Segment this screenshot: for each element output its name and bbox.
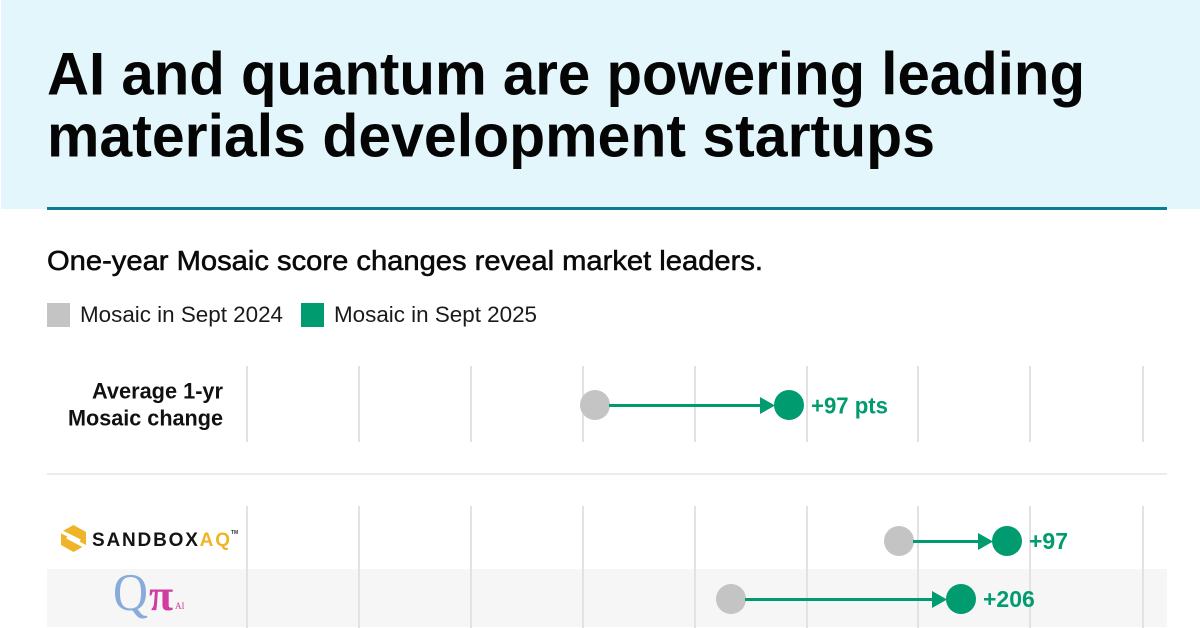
row background: QpiAI bbox=[47, 569, 1167, 627]
dumbbell: average bbox=[580, 390, 888, 420]
dumbbell: average: +97 pts bbox=[811, 392, 888, 418]
subtitle: One-year Mosaic score changes reveal market leaders. bbox=[47, 245, 763, 276]
title bbox=[47, 40, 1085, 170]
section divider bbox=[47, 473, 1167, 475]
logo: SandboxAQ bbox=[58, 524, 238, 553]
legend: 2025 label: Mosaic in Sept 2025 bbox=[334, 302, 537, 327]
row label: average change bbox=[68, 378, 223, 430]
title: AI and quantum are powering leading bbox=[47, 40, 1085, 108]
legend: 2024 label: Mosaic in Sept 2024 bbox=[80, 302, 283, 327]
icon: hexagon stripes bbox=[61, 525, 86, 552]
header band bbox=[1, 0, 1200, 209]
title: materials development startups bbox=[47, 102, 935, 170]
dumbbell: SandboxAQ bbox=[884, 526, 1068, 556]
logo: QpiAI: AI bbox=[175, 601, 184, 611]
logo: QpiAI: π bbox=[149, 571, 173, 620]
dumbbell: QpiAI bbox=[716, 584, 1035, 614]
legend bbox=[47, 302, 537, 327]
dumbbell: QpiAI: +206 bbox=[983, 586, 1035, 612]
row label: average change: Mosaic change bbox=[68, 406, 223, 430]
header rule bbox=[47, 207, 1167, 210]
row label: average change: Average 1-yr bbox=[92, 378, 223, 404]
logo: SandboxAQ: TM bbox=[231, 530, 238, 536]
legend: 2025 swatch bbox=[301, 303, 324, 327]
logo: QpiAI: Q bbox=[113, 564, 148, 622]
legend: 2024 swatch bbox=[47, 303, 70, 327]
logo: QpiAI bbox=[113, 564, 184, 622]
wordmark: SANDBOXAQ bbox=[92, 530, 230, 551]
dumbbell: SandboxAQ: +97 bbox=[1029, 528, 1068, 554]
